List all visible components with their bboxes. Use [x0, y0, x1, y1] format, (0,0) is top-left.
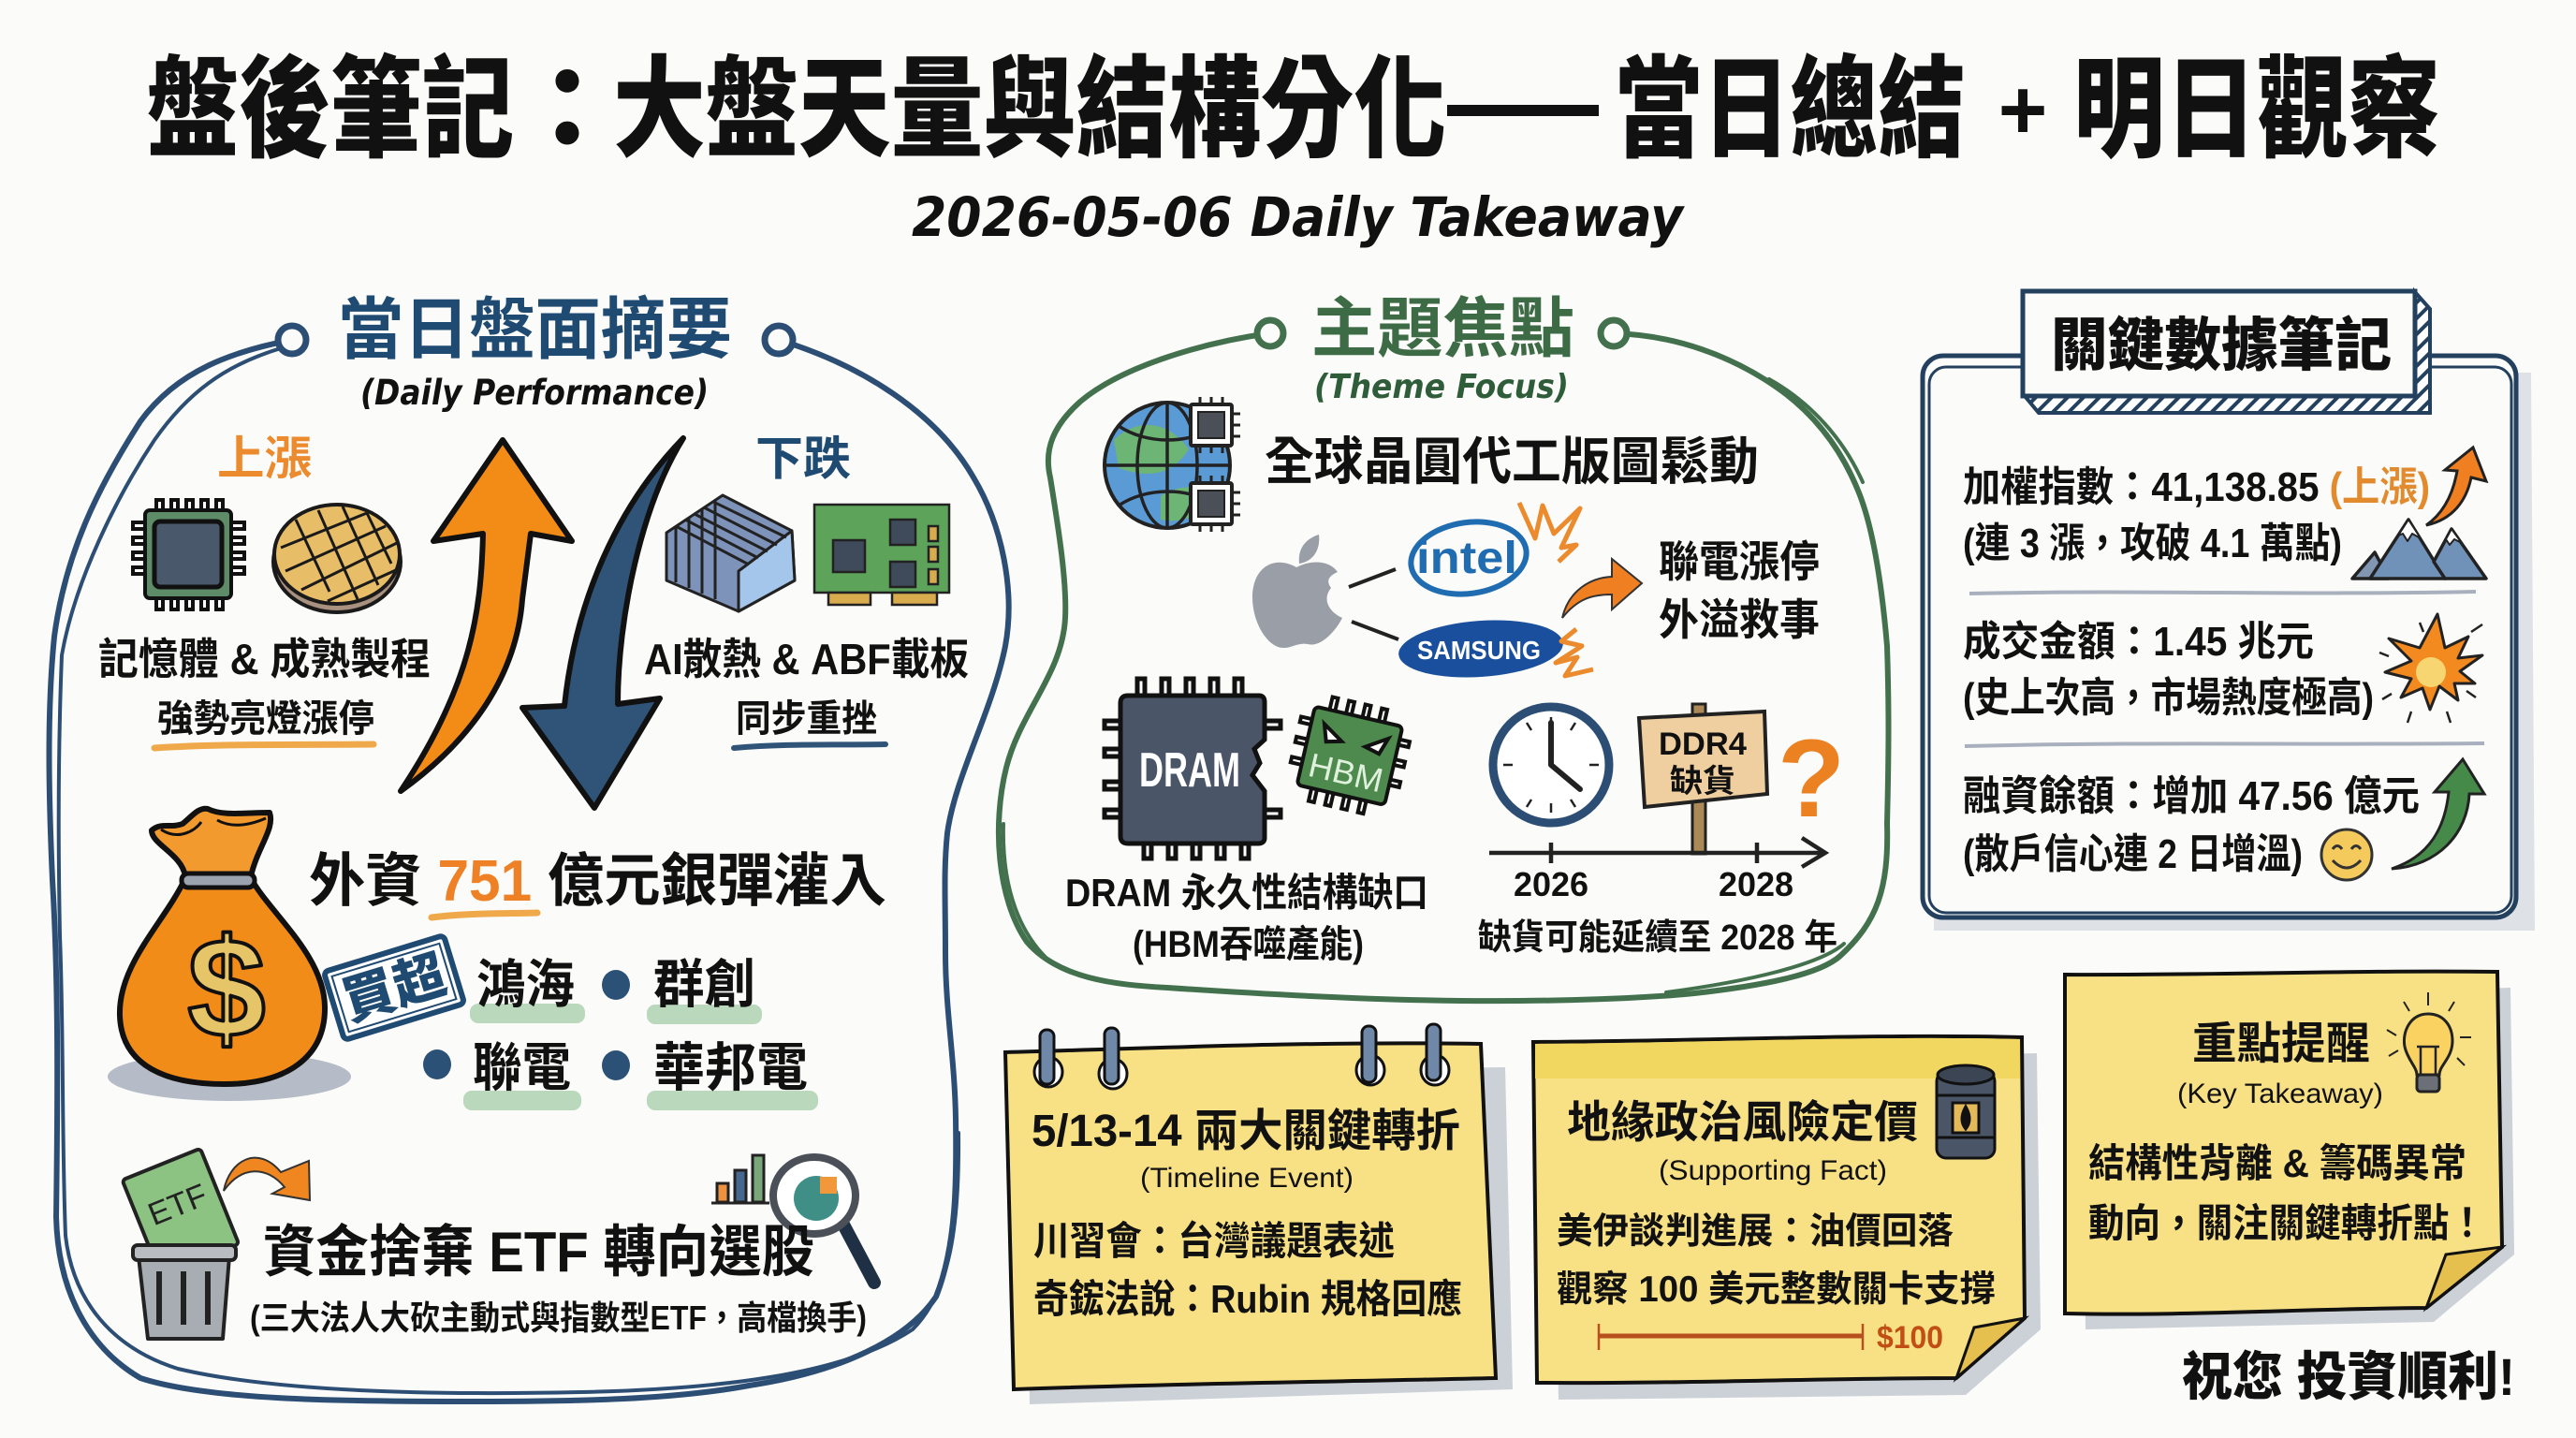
text: stock names: 鴻海	[476, 955, 575, 1014]
panel heading: 當日盤面摘要	[338, 293, 732, 368]
stamp: net buy	[324, 935, 464, 1040]
note title: 5/13-14 兩大關鍵轉折	[1032, 1107, 1460, 1156]
note body: 川習會：台灣議題表述	[1033, 1219, 1395, 1263]
title	[147, 49, 2440, 172]
underline: 751	[432, 913, 537, 917]
note body: 結構性背離 & 籌碼異常	[2088, 1141, 2466, 1185]
title: 盤後筆記	[147, 49, 514, 172]
text: ETF rotation: 資金捨棄 ETF 轉向選股	[263, 1221, 814, 1284]
stat: index: 加權指數：41,138.85 (上漲)	[1963, 464, 2430, 510]
note body	[1033, 1219, 1462, 1321]
arrow: down	[522, 438, 683, 808]
text: UMC limit up: 聯電漲停	[1659, 537, 1820, 586]
icon: heat sink	[666, 495, 795, 611]
text: stock names	[473, 955, 808, 1097]
icon: DDR4 shortage sign: DDR4	[1659, 726, 1747, 762]
note: supporting fact	[1533, 1036, 2041, 1400]
text: UMC limit up: 外溢救事	[1659, 595, 1820, 644]
connector lines	[1349, 569, 1398, 639]
note paper	[1533, 1036, 2025, 1383]
icon: circuit board	[814, 505, 949, 605]
icon: wafer	[273, 505, 401, 612]
icon: DRAM chip: DRAM	[1139, 743, 1240, 798]
text: stock names: 聯電	[473, 1038, 571, 1097]
text: stock names: 群創	[653, 955, 755, 1014]
arrow: up	[401, 440, 572, 791]
icon: ETF in trash: ETF	[143, 1178, 212, 1233]
icon: mountains	[2352, 520, 2486, 579]
panel: daily performance	[49, 293, 1009, 1401]
stat: margin: (散戶信心連 2 日增溫)	[1963, 831, 2303, 877]
logo: samsung	[1397, 615, 1565, 682]
stat: turnover: (史上次高，市場熱度極高)	[1963, 675, 2374, 721]
chart: $100 level: $100	[1877, 1320, 1943, 1356]
divider	[1965, 743, 2484, 746]
icon: light bulb	[2387, 992, 2471, 1092]
note rings	[1034, 1024, 1449, 1089]
logo: samsung: SAMSUNG	[1417, 636, 1541, 665]
note subtitle: (Key Takeaway)	[2177, 1078, 2383, 1109]
arrow: index up	[2426, 448, 2486, 525]
text: stock names: 華邦電	[653, 1038, 808, 1097]
underline: down note	[734, 744, 886, 748]
title: 當日總結	[1615, 49, 1966, 172]
text: foundry shift: 全球晶圓代工版圖鬆動	[1265, 433, 1759, 491]
icon: HBM chip: HBM	[1305, 745, 1386, 800]
panel heading box: 關鍵數據筆記	[2051, 314, 2392, 378]
note shadow	[1025, 1067, 1513, 1404]
chart: timeline: 2028	[1719, 865, 1793, 903]
note fold	[2426, 1247, 2502, 1308]
note shadow	[1554, 1053, 2041, 1400]
text: DRAM gap: DRAM 永久性結構缺口	[1065, 871, 1428, 915]
note body	[1557, 1211, 1996, 1310]
icon: bars and magnifier	[711, 1155, 874, 1283]
icon: DRAM chip	[1105, 679, 1281, 858]
icon: oil barrel	[1937, 1065, 1995, 1158]
text: foreign inflow: 外資 751 億元銀彈灌入	[309, 849, 886, 914]
stat: turnover	[1963, 619, 2374, 721]
note body: 觀察 100 美元整數關卡支撐	[1557, 1269, 1996, 1310]
title: ：	[512, 49, 622, 172]
chart: timeline	[1489, 838, 1825, 903]
icon: smile	[2321, 829, 2372, 880]
subtitle: 2026-05-06 Daily Takeaway	[912, 185, 1685, 249]
text: ETF note: (三大法人大砍主動式與指數型ETF，高檔換手)	[250, 1299, 867, 1337]
chart: $100 level	[1599, 1320, 1943, 1356]
logo: intel: intel	[1416, 534, 1517, 583]
text: up sectors: 記憶體 & 成熟製程	[98, 635, 431, 683]
icon: sparks	[1519, 503, 1593, 676]
panel outline	[49, 326, 1009, 1401]
underline: up note	[154, 744, 373, 748]
panel outline	[999, 320, 1889, 1001]
panel frame	[1923, 356, 2535, 931]
icon: money bag	[108, 809, 351, 1101]
text: UMC limit up	[1659, 537, 1820, 644]
chart: timeline: 2026	[1514, 865, 1588, 903]
title: 大盤天量與結構分化	[613, 49, 1446, 172]
note: timeline event	[1005, 1024, 1513, 1404]
bullets: stocks	[423, 970, 630, 1080]
note title: 地緣政治風險定價	[1567, 1097, 1918, 1147]
note fold	[1956, 1318, 2025, 1378]
icon: apple	[1252, 535, 1342, 648]
note subtitle: (Timeline Event)	[1140, 1163, 1354, 1194]
note: key takeaway	[2065, 972, 2514, 1329]
note body: 動向，關注關鍵轉折點！	[2088, 1201, 2485, 1245]
panel heading box	[2023, 291, 2430, 413]
panel subheading: (Daily Performance)	[360, 373, 709, 413]
icon: memory chip	[133, 500, 244, 609]
stat: margin	[1963, 773, 2420, 877]
note paper	[2065, 972, 2502, 1314]
note shadow	[2083, 988, 2514, 1329]
panel: theme focus	[999, 292, 1889, 1001]
text: shortage extends: 缺貨可能延續至 2028 年	[1478, 918, 1837, 958]
note body: 美伊談判進展：油價回落	[1557, 1211, 1954, 1252]
divider	[1969, 592, 2476, 594]
highlights: stocks	[463, 1004, 818, 1110]
text: down note: 同步重挫	[736, 698, 877, 740]
icon: question mark: ?	[1778, 717, 1845, 841]
stat: index: (連 3 漲，攻破 4.1 萬點)	[1963, 521, 2342, 566]
arrow: spillover	[1562, 559, 1642, 618]
arrow: margin up	[2392, 759, 2484, 869]
note title: 重點提醒	[2192, 1019, 2370, 1068]
text: HBM note: (HBM吞噬產能)	[1133, 924, 1364, 965]
closing message: 祝您 投資順利!	[2182, 1347, 2515, 1406]
icon: ETF in trash	[123, 1149, 239, 1339]
note body	[2088, 1141, 2485, 1245]
panel: key data notes	[1923, 291, 2535, 931]
text: down sectors: AI散熱 & ABF載板	[644, 635, 969, 683]
arrow: curved orange	[224, 1158, 310, 1200]
text: up note: 強勢亮燈漲停	[157, 698, 374, 740]
note subtitle: (Supporting Fact)	[1659, 1155, 1887, 1186]
logo: intel	[1406, 515, 1531, 601]
stamp: net buy: 買超	[335, 945, 453, 1032]
note top band	[1535, 1038, 2020, 1078]
icon: DDR4 shortage sign: 缺貨	[1670, 764, 1735, 800]
note body: 奇鋐法說：Rubin 規格回應	[1033, 1277, 1462, 1321]
stat: margin: 融資餘額：增加 47.56 億元	[1963, 773, 2420, 819]
panel heading: 主題焦點	[1311, 292, 1574, 365]
stat: turnover: 成交金額：1.45 兆元	[1963, 619, 2314, 665]
label: down: 下跌	[755, 433, 851, 485]
icon: globe with chips	[1105, 397, 1240, 532]
title: +	[1998, 64, 2047, 157]
icon: money bag: $	[187, 909, 266, 1066]
panel subheading: (Theme Focus)	[1314, 368, 1569, 406]
label: up: 上漲	[217, 433, 312, 485]
note paper	[1005, 1043, 1496, 1389]
stat: index	[1963, 464, 2430, 566]
icon: HBM chip	[1283, 691, 1415, 820]
icon: burst	[2379, 614, 2482, 723]
icon: DDR4 shortage sign	[1639, 704, 1767, 854]
icon: clock	[1493, 707, 1609, 823]
title: 明日觀察	[2073, 49, 2440, 172]
